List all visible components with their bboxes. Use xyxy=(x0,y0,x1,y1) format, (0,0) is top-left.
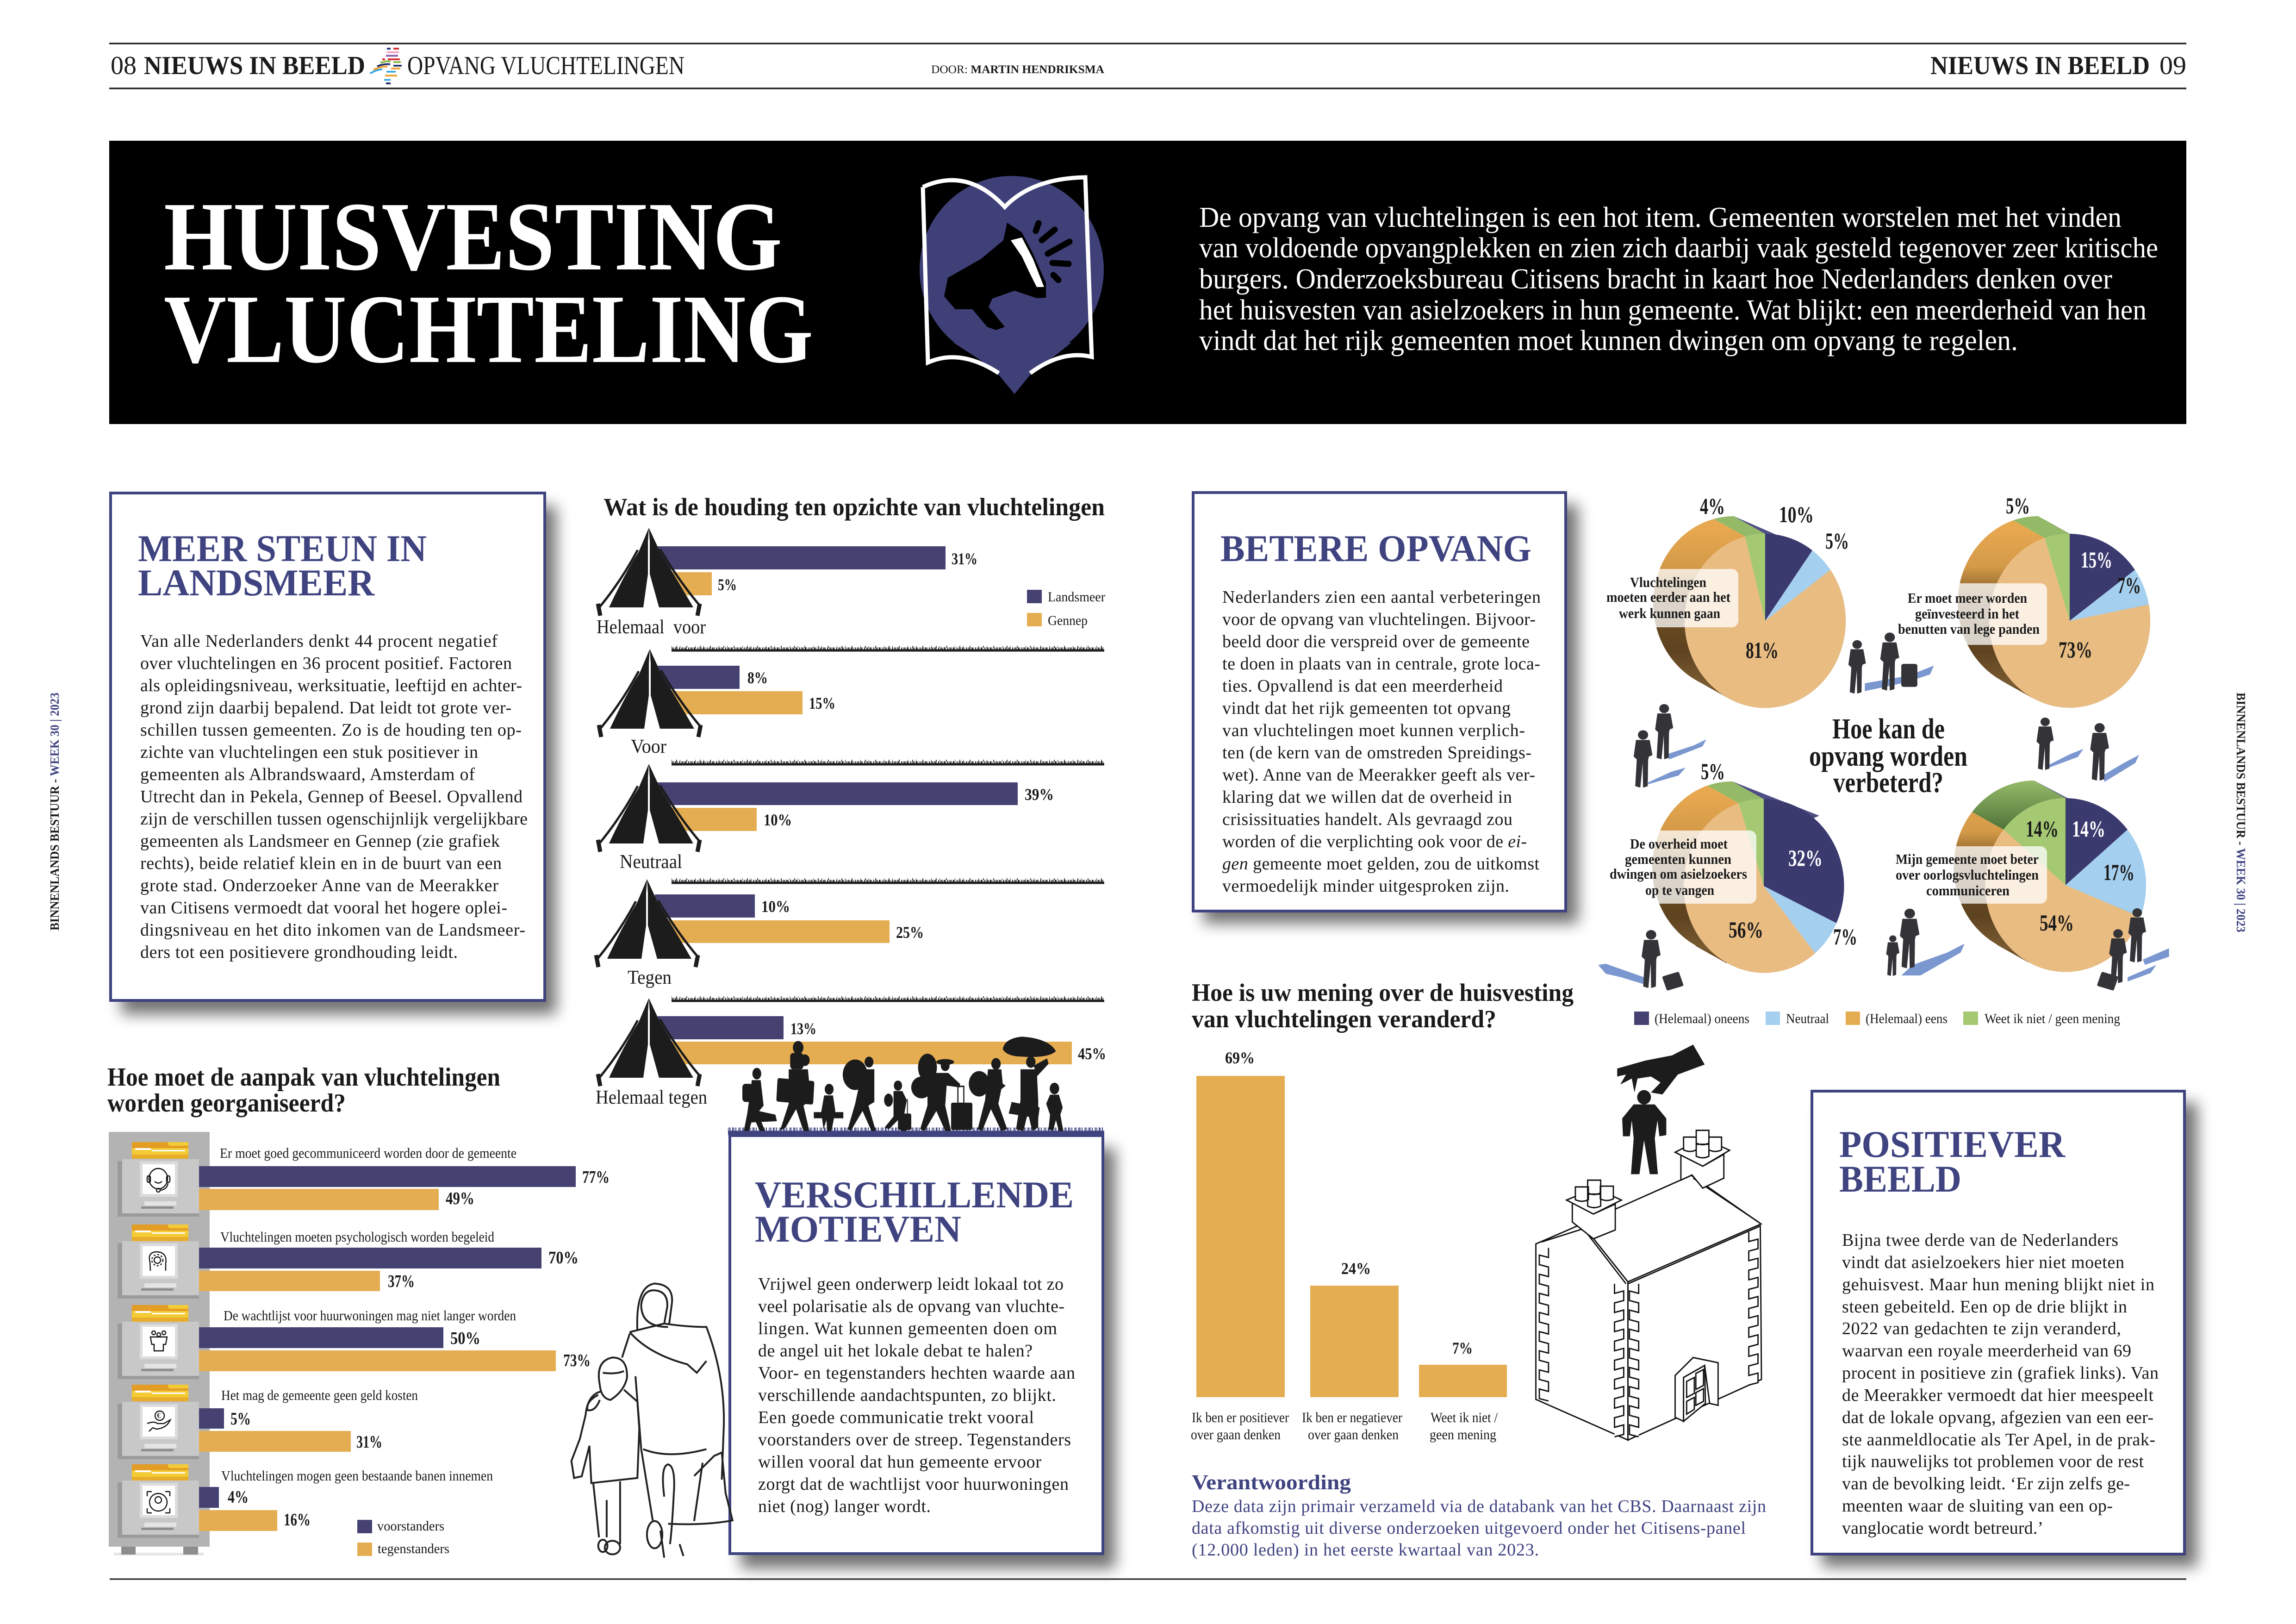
bar captions: Het mag de gemeente geen geld kosten xyxy=(221,1387,418,1403)
pies central heading xyxy=(1809,713,1967,799)
section name left: NIEUWS IN BEELD xyxy=(144,51,365,80)
section name right: NIEUWS IN BEELD xyxy=(1930,51,2150,80)
heading: MOTIEVEN xyxy=(755,1208,961,1250)
chart: houding ten opzichte van vluchtelingen xyxy=(596,493,1106,1108)
chart title xyxy=(107,1063,500,1118)
pie percentage labels: 14% xyxy=(2072,816,2105,842)
body text: gen gemeente moet gelden, zou de uitkomst xyxy=(1222,854,1539,874)
value labels xyxy=(1225,1049,1473,1357)
body text: zorgt dat de wachtlijst voor huurwoningen xyxy=(758,1474,1069,1494)
value labels: 24% xyxy=(1341,1259,1371,1278)
pie captions with translucent boxes: benutten van lege panden xyxy=(1898,621,2040,637)
body text: worden of die verplichting ook voor de ei- xyxy=(1222,832,1527,851)
pies central heading: verbeterd? xyxy=(1833,767,1943,799)
heading: BETERE OPVANG xyxy=(1220,527,1531,569)
chart: pie 3 dwingen xyxy=(1652,781,1844,973)
hand and person silhouette xyxy=(1617,1045,1705,1174)
body text xyxy=(1842,1230,2159,1538)
legend for pies: (Helemaal) oneens xyxy=(1655,1011,1749,1026)
value labels xyxy=(228,1168,610,1530)
value labels: 70% xyxy=(548,1248,579,1268)
panel: betere opvang xyxy=(1193,493,1578,924)
body text: van vluchtelingen moet kunnen verplich- xyxy=(1222,721,1525,740)
pie captions with translucent boxes: gemeenten kunnen xyxy=(1625,851,1731,867)
legend for pies xyxy=(1634,1011,2120,1026)
legend: Landsmeer xyxy=(1048,589,1105,605)
legend for pies: Weet ik niet / geen mening xyxy=(1985,1011,2120,1026)
body text: zijn de verschillen tussen ogenschijnlijk vergelijkbare xyxy=(140,809,528,829)
pie percentage labels: 81% xyxy=(1746,637,1779,663)
intro text: het huisvesten van asielzoekers in hun gemeente. Wat blijkt: een meerderheid van hen xyxy=(1199,294,2147,326)
axis labels: Ik ben er negatiever xyxy=(1302,1409,1403,1425)
body text: vindt dat het rijk gemeenten tot opvang xyxy=(1222,699,1511,718)
body text: tijk nauwelijks tot problemen voor de rest xyxy=(1842,1452,2144,1471)
bar captions: Er moet goed gecommuniceerd worden door de gemeente xyxy=(220,1145,516,1161)
pie percentage labels: 14% xyxy=(2026,816,2059,842)
pie percentage labels xyxy=(1700,493,2141,949)
byline: DOOR: MARTIN HENDRIKSMA xyxy=(931,63,1104,76)
body text: ten (de kern van de omstreden Spreidings- xyxy=(1222,743,1531,762)
panel: verschillende motieven xyxy=(730,1136,1115,1568)
chart: aanpak van vluchtelingen xyxy=(107,1063,610,1556)
value labels: 31% xyxy=(952,550,977,568)
pie percentage labels: 17% xyxy=(2103,859,2134,885)
bars xyxy=(655,546,1072,1064)
body text: als opleidingsniveau, werksituatie, leeftijd en achter- xyxy=(140,676,522,695)
category labels xyxy=(596,617,707,1108)
body text: Nederlanders zien een aantal verbeteringen xyxy=(1222,587,1541,607)
icon: coloured logo xyxy=(370,49,402,83)
illustration: filing cabinet xyxy=(109,1132,210,1555)
value labels: 5% xyxy=(230,1409,251,1429)
chart: pie 4 communiceren xyxy=(1954,781,2146,972)
pie percentage labels: 5% xyxy=(1701,758,1725,784)
axis labels: over gaan denken xyxy=(1191,1426,1281,1443)
quoins xyxy=(1539,1248,1549,1401)
pie captions with translucent boxes: geïnvesteerd in het xyxy=(1915,606,2020,622)
value labels: 7% xyxy=(1452,1339,1473,1357)
heading xyxy=(755,1174,1074,1250)
bar captions: De wachtlijst voor huurwoningen mag niet langer worden xyxy=(224,1307,516,1324)
axis labels: Weet ik niet / xyxy=(1431,1409,1498,1425)
intro text xyxy=(1199,202,2158,356)
body text: rechts), beide relatief klein en in de buurt van een xyxy=(140,854,502,873)
body text: Van alle Nederlanders denkt 44 procent negatief xyxy=(140,631,498,651)
chart: pie 1 werk xyxy=(1653,516,1846,708)
side text right: BINNENLANDS BESTUUR - WEEK 30 | 2023 xyxy=(2234,693,2248,932)
value labels: 50% xyxy=(450,1329,480,1348)
axis labels: over gaan denken xyxy=(1308,1426,1399,1443)
body text: Vrijwel geen onderwerp leidt lokaal tot zo xyxy=(758,1274,1064,1294)
body text: de angel uit het lokale debat te halen? xyxy=(758,1341,1033,1361)
pie captions with translucent boxes: Er moet meer worden xyxy=(1908,590,2027,606)
title: VLUCHTELING xyxy=(164,275,813,383)
chart title: Hoe is uw mening over de huisvesting xyxy=(1192,979,1574,1006)
header bar xyxy=(109,44,2186,88)
body text: lingen. Wat kunnen gemeenten doen om xyxy=(758,1319,1057,1338)
bar captions xyxy=(220,1145,516,1484)
body text: verschillende aandachtspunten, zo blijkt. xyxy=(758,1386,1056,1405)
axis labels: Ik ben er positiever xyxy=(1192,1409,1289,1425)
value labels: 73% xyxy=(563,1351,591,1370)
value labels: 77% xyxy=(582,1168,610,1187)
icon: group of people xyxy=(150,1331,167,1351)
page number right: 09 xyxy=(2159,51,2186,80)
body text: niet (nog) langer wordt. xyxy=(758,1497,931,1516)
value labels: 4% xyxy=(228,1487,249,1507)
body text: procent in positieve zin (grafiek links). Van xyxy=(1842,1363,2159,1383)
door xyxy=(1675,1357,1718,1421)
pie captions with translucent boxes: over oorlogsvluchtelingen xyxy=(1896,867,2039,883)
body text: voorstanders over de streep. Tegenstanders xyxy=(758,1430,1071,1449)
pie captions with translucent boxes: communiceren xyxy=(1926,882,2010,899)
illustration: refugee silhouettes walking on grass xyxy=(728,1037,1104,1133)
pie percentage labels: 15% xyxy=(2081,547,2112,573)
bars xyxy=(199,1166,576,1531)
body text: vermoedelijk minder uitgesproken zijn. xyxy=(1222,876,1509,896)
section subject: OPVANG VLUCHTELINGEN xyxy=(407,51,684,80)
icon: tents xyxy=(596,528,701,1086)
body text: 2022 van gedachten te zijn veranderd, xyxy=(1842,1319,2121,1338)
value labels: 25% xyxy=(896,923,924,942)
chart title: Wat is de houding ten opzichte van vluchtelingen xyxy=(604,493,1105,521)
pie captions with translucent boxes: De overheid moet xyxy=(1630,836,1728,852)
pie percentage labels: 5% xyxy=(2006,493,2030,518)
body text: gehuisvest. Maar hun mening blijkt niet in xyxy=(1842,1275,2154,1294)
body text: grond zijn daarbij bepalend. Dat leidt tot grote ver- xyxy=(140,698,511,718)
body text: de Meerakker vermoedt dat hier meespeelt xyxy=(1842,1386,2153,1405)
heading: LANDSMEER xyxy=(138,562,375,604)
intro text: vindt dat het rijk gemeenten moet kunnen dwingen om opvang te regelen. xyxy=(1199,325,2018,356)
bar captions: Vluchtelingen moeten psychologisch worden begeleid xyxy=(220,1229,494,1245)
body text: over vluchtelingen en 36 procent positief. Factoren xyxy=(140,654,512,673)
legend for pies: (Helemaal) eens xyxy=(1866,1011,1948,1026)
value labels: 39% xyxy=(1025,785,1054,804)
body text: zichte van vluchtelingen een stuk positiever in xyxy=(140,743,478,762)
pie percentage labels: 7% xyxy=(2117,572,2141,598)
value labels: 49% xyxy=(446,1189,474,1208)
chart title xyxy=(1192,979,1574,1033)
pie captions with translucent boxes: moeten eerder aan het xyxy=(1606,589,1731,605)
value labels: 45% xyxy=(1078,1044,1106,1063)
value labels: 15% xyxy=(809,694,835,712)
body text: willen vooral dat hun gemeente ervoor xyxy=(758,1452,1041,1472)
body text: dingsniveau en het dito inkomen van de Landsmeer- xyxy=(140,920,525,940)
body text: vindt dat asielzoekers hier niet moeten xyxy=(1842,1253,2124,1272)
category labels: Tegen xyxy=(628,967,672,988)
value labels: 69% xyxy=(1225,1049,1255,1067)
chart: mening veranderd xyxy=(1191,979,1574,1443)
body text xyxy=(1222,587,1541,896)
body text: dat de lokale opvang, afgezien van een eer- xyxy=(1842,1408,2153,1427)
value labels: 10% xyxy=(761,897,790,916)
illustration: small walking figures with shadows xyxy=(1598,632,2169,991)
legend xyxy=(357,1518,449,1556)
chimney left xyxy=(1572,1202,1615,1239)
page number left: 08 xyxy=(111,51,137,80)
category labels: Voor xyxy=(631,736,666,757)
house walls and roof xyxy=(1536,1131,1761,1440)
side text left: BINNENLANDS BESTUUR - WEEK 30 | 2023 xyxy=(48,693,62,931)
body text: Utrecht dan in Pekela, Gennep of Beesel. Opvallend xyxy=(140,787,523,806)
title banner xyxy=(109,141,2186,424)
legend: tegenstanders xyxy=(378,1541,449,1556)
body text: crisissituaties handelt. Als gevraagd zou xyxy=(1222,810,1512,829)
pie percentage labels: 32% xyxy=(1788,845,1823,871)
text block: verantwoording xyxy=(1192,1470,1766,1560)
legend xyxy=(1027,589,1105,628)
category labels: Helemaal tegen xyxy=(596,1087,707,1108)
body text: ties. Opvallend is dat een meerderheid xyxy=(1222,676,1503,696)
title: HUISVESTING xyxy=(164,182,782,291)
value labels: 31% xyxy=(356,1432,382,1452)
icon: head with gear xyxy=(149,1252,166,1271)
chart title: Hoe moet de aanpak van vluchtelingen xyxy=(107,1063,500,1092)
icon: hand with euro xyxy=(147,1411,170,1431)
body text: Bijna twee derde van de Nederlanders xyxy=(1842,1230,2118,1250)
value labels: 5% xyxy=(718,575,737,594)
body text: Voor- en tegenstanders hechten waarde aan xyxy=(758,1363,1075,1383)
axis labels: geen mening xyxy=(1430,1426,1496,1443)
heading: POSITIEVER xyxy=(1839,1123,2066,1165)
text block: verantwoording: data afkomstig uit diverse onderzoeken uitgevoerd onder het Citisens-panel xyxy=(1192,1518,1746,1538)
body text: van de bevolking leidt. ‘Er zijn zelfs ge- xyxy=(1842,1474,2130,1493)
illustration: mother and child line drawing xyxy=(572,1284,733,1558)
chart title: worden georganiseerd? xyxy=(107,1089,346,1118)
chart: pie 2 lege panden xyxy=(1958,516,2150,708)
bars xyxy=(1196,1076,1507,1397)
legend for pies: Neutraal xyxy=(1786,1011,1829,1026)
value labels: 13% xyxy=(790,1019,816,1038)
pie percentage labels: 10% xyxy=(1779,501,1814,527)
intro text: van voldoende opvangplekken en zien zich daarbij vaak gesteld tegenover zeer kritische xyxy=(1199,232,2158,264)
body text: te doen in plaats van in centrale, grote loca- xyxy=(1222,654,1540,674)
pie percentage labels: 7% xyxy=(1833,924,1857,949)
category labels: Neutraal xyxy=(620,851,682,873)
body text: van Citisens vermoedt dat vooral het hogere oplei- xyxy=(140,898,507,918)
text block: verantwoording: Verantwoording xyxy=(1192,1470,1351,1494)
chimney right xyxy=(1681,1152,1724,1188)
body text: Een goede communicatie trekt vooral xyxy=(758,1408,1034,1427)
value labels xyxy=(718,550,1106,1063)
title xyxy=(164,182,813,383)
pie percentage labels: 5% xyxy=(1825,528,1849,554)
pie captions with translucent boxes: Mijn gemeente moet beter xyxy=(1896,851,2039,867)
bar captions: Vluchtelingen mogen geen bestaande banen innemen xyxy=(221,1468,493,1484)
body text: beeld door die verspreid over de gemeente xyxy=(1222,632,1530,651)
pie captions with translucent boxes: dwingen om asielzoekers xyxy=(1610,866,1747,882)
intro text: burgers. Onderzoeksbureau Citisens bracht in kaart hoe Nederlanders denken over xyxy=(1199,263,2112,295)
legend: voorstanders xyxy=(377,1518,444,1534)
icon: megaphone in book xyxy=(920,176,1104,394)
heading: BEELD xyxy=(1839,1158,1961,1200)
heading xyxy=(1839,1123,2066,1200)
panel: positiever beeld xyxy=(1812,1091,2197,1567)
illustration: filing cabinet: € xyxy=(157,1412,161,1420)
body text: vanglocatie wordt betreurd.’ xyxy=(1842,1518,2043,1538)
chart title: van vluchtelingen veranderd? xyxy=(1192,1005,1496,1033)
heading xyxy=(138,527,427,604)
text block: verantwoording: (12.000 leden) in het eerste kwartaal van 2023. xyxy=(1192,1540,1539,1560)
pie percentage labels: 56% xyxy=(1729,917,1763,943)
body text: ste aanmeldlocatie als Ter Apel, in de prak- xyxy=(1842,1430,2155,1449)
value labels: 10% xyxy=(764,811,792,829)
icon: headset xyxy=(147,1168,170,1192)
bottom rule xyxy=(110,1579,2186,1580)
body text xyxy=(758,1274,1075,1516)
illustration: isometric house with hand placing person xyxy=(1536,1045,1761,1440)
body text: meenten waar de sluiting van een op- xyxy=(1842,1496,2113,1516)
body text: waarvan een royale meerderheid van 69 xyxy=(1842,1341,2131,1361)
body text: wet). Anne van de Meerakker geeft als ver- xyxy=(1222,765,1535,785)
pie captions with translucent boxes: werk kunnen gaan xyxy=(1619,605,1720,621)
grass dividers xyxy=(672,647,1104,1001)
pie captions with translucent boxes: Vluchtelingen xyxy=(1630,574,1706,590)
axis labels xyxy=(1191,1409,1498,1443)
body text: ders tot een positievere grondhouding leidt. xyxy=(140,943,458,962)
category labels: Helemaal voor xyxy=(597,617,706,638)
pie percentage labels: 54% xyxy=(2040,910,2074,936)
text block: verantwoording: Deze data zijn primair verzameld via de databank van het CBS. Daarnaast zijn xyxy=(1192,1497,1766,1516)
body text: steen gebeiteld. Een op de drie blijkt in xyxy=(1842,1297,2127,1317)
pie percentage labels: 73% xyxy=(2059,637,2092,662)
legend: Gennep xyxy=(1048,613,1088,628)
heading: VERSCHILLENDE xyxy=(755,1174,1074,1216)
heading: MEER STEUN IN xyxy=(138,527,427,569)
body text: gemeenten als Albrandswaard, Amsterdam of xyxy=(140,765,475,784)
body text: veel polarisatie als de opvang van vluchte- xyxy=(758,1297,1064,1316)
pies central heading: Hoe kan de xyxy=(1832,713,1945,745)
panel: meer steun in landsmeer xyxy=(111,493,556,1014)
pie captions with translucent boxes xyxy=(1598,569,2047,904)
value labels: 16% xyxy=(284,1510,311,1530)
icon: person in focus frame xyxy=(147,1492,170,1513)
body text: grote stad. Onderzoeker Anne van de Meerakker xyxy=(140,876,498,895)
pies central heading: opvang worden xyxy=(1809,741,1967,772)
value labels: 37% xyxy=(388,1272,415,1291)
intro text: De opvang van vluchtelingen is een hot item. Gemeenten worstelen met het vinden xyxy=(1199,202,2122,233)
body text xyxy=(140,631,528,962)
body text: schillen tussen gemeenten. Zo is de houding ten op- xyxy=(140,720,522,740)
value labels: 8% xyxy=(747,668,768,687)
body text: gemeenten als Landsmeer en Gennep (zie grafiek xyxy=(140,831,500,851)
body text: klaring dat we willen dat de overheid in xyxy=(1222,787,1512,807)
body text: voor de opvang van vluchtelingen. Bijvoor- xyxy=(1222,610,1536,629)
pie captions with translucent boxes: op te vangen xyxy=(1645,882,1714,898)
pie percentage labels: 4% xyxy=(1700,493,1725,519)
